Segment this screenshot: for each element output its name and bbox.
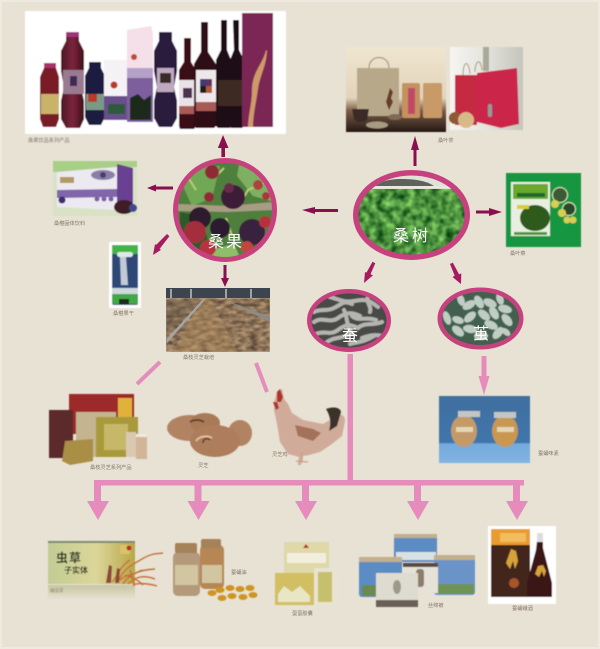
label: silkworm: 蚕 [342,328,358,345]
arrow: mulberry fruit to powder drink [147,184,173,192]
node: cocoon ellipse [440,290,522,348]
wine bottle 1 [179,38,196,129]
caption: ganoderma products: 桑枝灵芝系列产品 [90,463,132,471]
label: mulberry fruit: 桑果 [208,233,244,251]
silkworm photo [312,294,386,348]
photo: silkworm pupa product jars [439,396,530,463]
branching arrows: silkworm to five products [87,354,528,520]
fruit [449,112,461,124]
node: mulberry fruit circle [175,160,275,262]
arrowhead 2 [188,484,210,520]
bottle 4 [154,32,177,127]
paper bag [357,68,399,116]
photo: cordyceps box: 蛹虫草 [50,587,64,594]
arrow: tree to silkworm [364,262,375,283]
photo: male moth wine [488,526,556,604]
red bags [455,75,477,125]
arrowhead 3 [295,484,317,520]
ice wine bottles [216,20,231,128]
photo: mulberry drink product range [25,11,286,144]
bottle 2 [61,32,84,128]
photo: powder drink box [53,161,137,216]
caption: pupa oil: 蚕蛹油 [231,568,247,576]
connector: fungus field to products [137,362,160,384]
bottle 3 [85,62,105,125]
photo: cordyceps box: 虫草 [56,550,82,565]
photo: cordyceps box [48,541,163,600]
arrow: tree to tea [411,136,419,166]
bottle [527,541,552,597]
arrow: mulberry fruit to dried fruit [153,234,169,255]
photo: mulberry-twig fungus field [166,288,270,352]
node: mulberry tree ellipse [355,172,470,262]
cups and tea dish [352,109,369,122]
connector: fungus field to chicken [256,363,267,392]
photo: mulberry-twig ganoderma products [49,394,147,465]
round insets [552,188,568,202]
arrow: mulberry fruit to fungus field [221,265,229,287]
caption: capsules: 蛋蛋胶囊 [292,609,313,617]
caption: dried mulberry: 桑椹果干 [113,309,134,317]
photo: pupa capsules boxes [275,542,337,605]
bottle 1 [40,63,59,127]
photo: cordyceps box: 子实体 [64,565,88,575]
arrow: tree to cocoon [450,263,461,284]
dark berries [221,185,245,209]
wine bottle 2 [194,22,216,128]
arrow: tree to leaf vegetable [476,208,502,216]
caption: silk quilt: 丝绵被 [428,601,444,609]
photo: mulberry leaf tea packaging [346,47,446,132]
arrow: cocoon to silkworm-pupa product [478,356,490,395]
tall carton [127,26,153,120]
photo: silkworm pupa oil jars [173,539,258,601]
arrowhead 5 [506,480,528,520]
caption: fungus field: 桑枝灵芝栽培 [183,353,214,361]
photo: mulberry leaf vegetable pack [506,173,581,247]
mulberry field photo [358,176,464,254]
caption: mulberry leaf tea: 桑叶茶 [438,136,454,144]
label: cocoon: 茧 [473,325,489,343]
bag [511,182,550,236]
mulberry photo [178,163,272,257]
caption: pupa product: 蚕蛹味素 [538,449,559,457]
caption: mulberry leaf vegetable: 桑叶菜 [510,249,526,257]
arrowhead 4 [407,484,429,520]
caption: powder drink: 桑椹固体饮料 [54,219,85,227]
caption: chicken: 灵芝鸡 [272,450,288,458]
red berries [184,221,206,243]
tea canisters [402,83,420,118]
capsules [208,585,258,601]
arrowhead 1 [87,480,109,520]
photo: ganoderma-fed chicken [273,389,345,465]
small box [62,439,93,465]
label: drinks: 桑果饮品系列产品 [28,136,70,144]
carton small [104,60,129,120]
wine gift box [242,13,273,127]
photo: silk quilt boxes [359,534,475,607]
photo: dried mulberry can [109,242,141,308]
label: mulberry tree: 桑树 [393,227,431,245]
jars [126,432,136,457]
caption: male moth wine: 蚕蛹蛾酒 [512,604,533,612]
node: silkworm ellipse [310,292,390,350]
arrow: mulberry fruit to drinks [218,135,228,157]
arrow: tree to mulberry fruit [302,207,338,214]
photo: ganoderma mushrooms [167,413,252,457]
caption: ganoderma: 灵芝 [198,461,208,469]
cordyceps strands [112,553,163,586]
photo: red gift boxes [449,47,523,130]
cocoon photo [442,292,519,345]
